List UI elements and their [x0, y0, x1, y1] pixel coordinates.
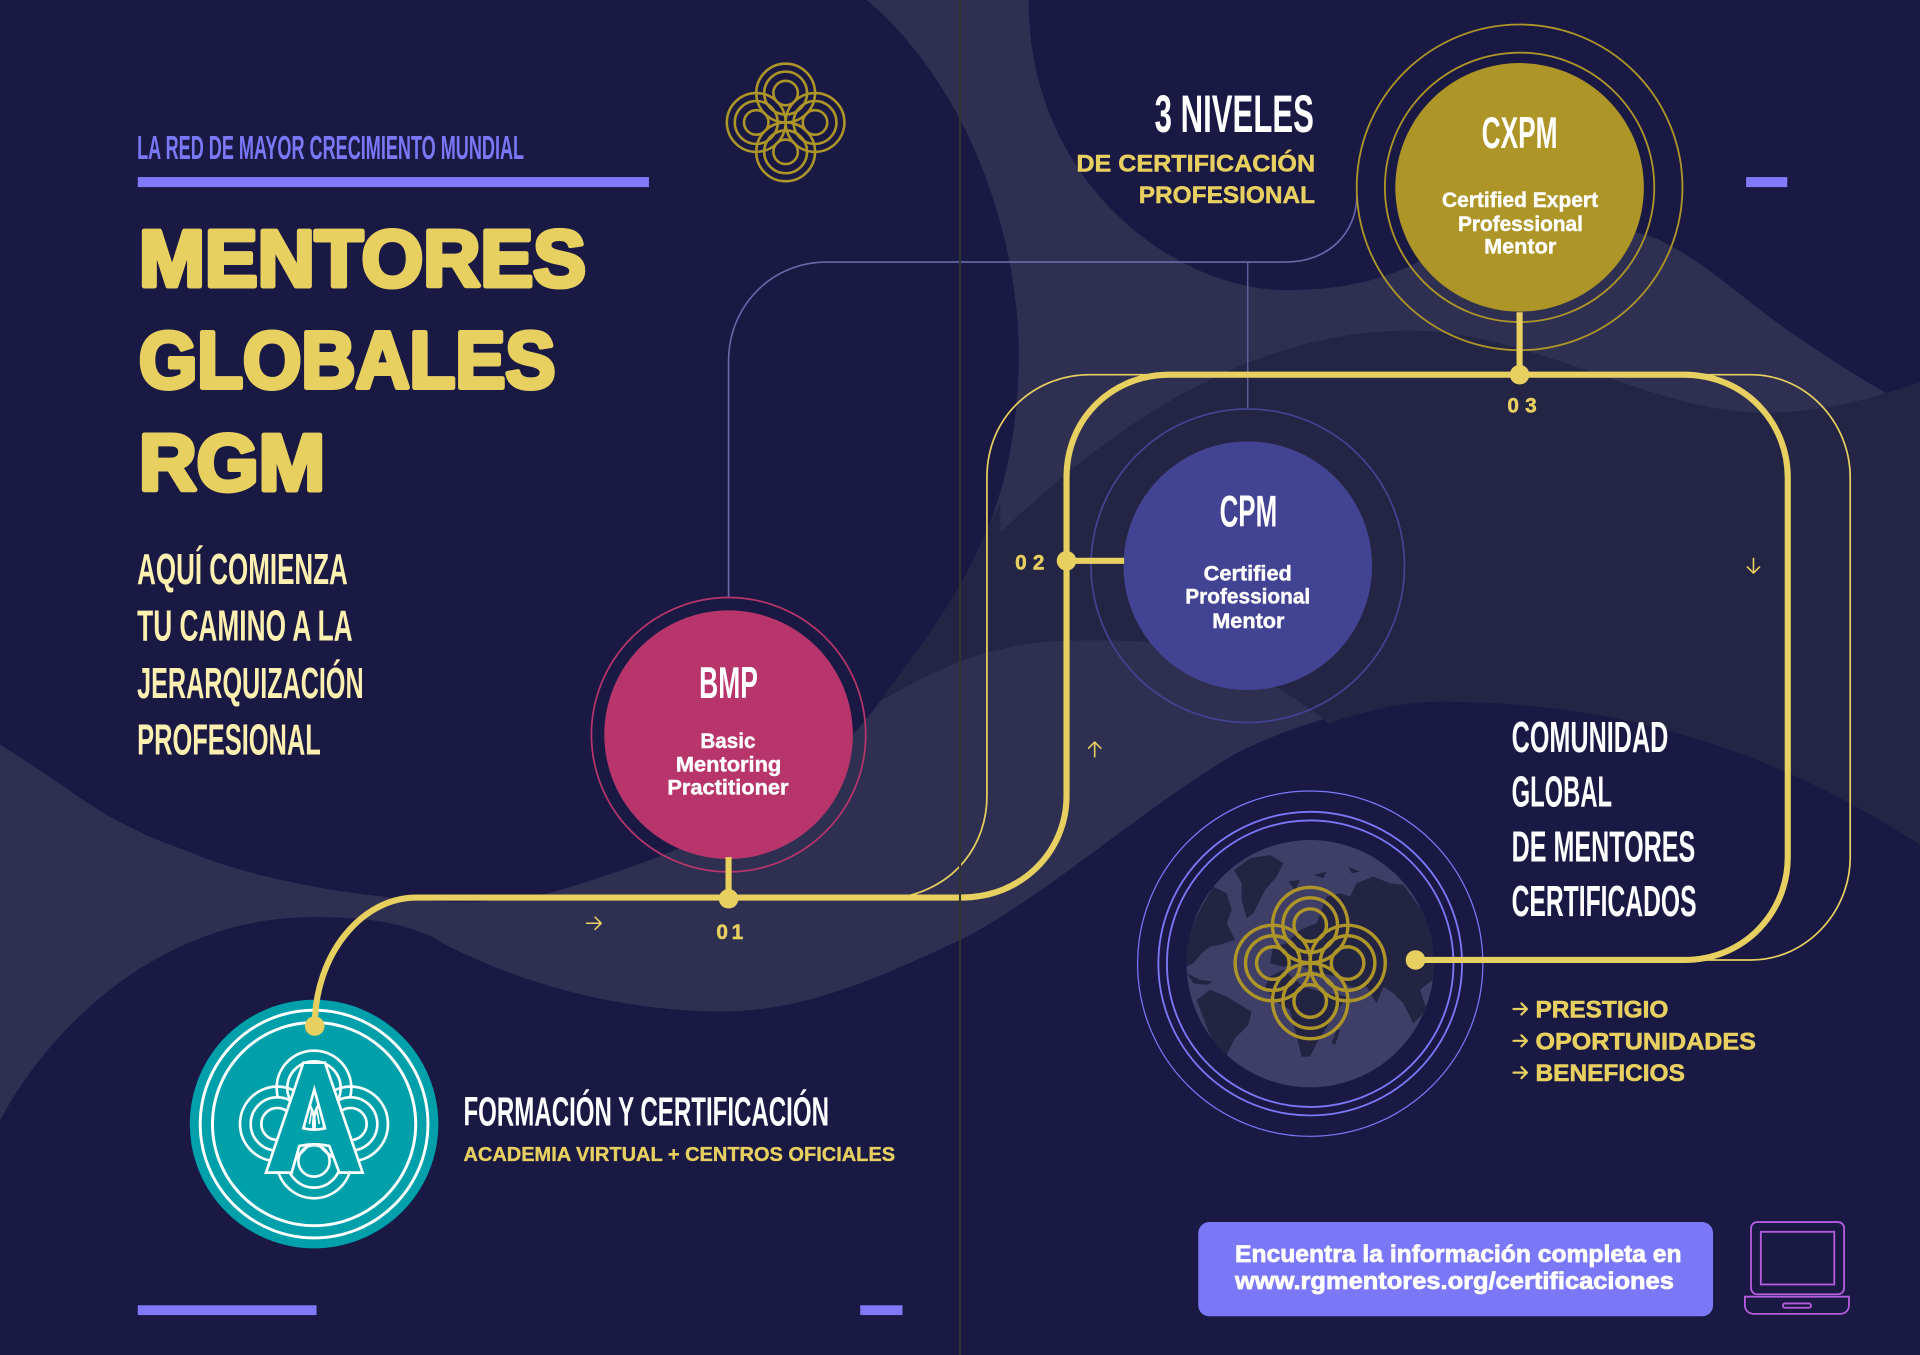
training text: [463, 1088, 895, 1166]
BMP name: Basic: [700, 730, 756, 753]
community heading: DE MENTORES: [1512, 823, 1695, 871]
CPM name: Certified: [1204, 562, 1292, 585]
subtitle: AQUÍ COMIENZA: [137, 544, 348, 594]
direction arrow up: [1089, 742, 1101, 757]
kicker: LA RED DE MAYOR CRECIMIENTO MUNDIAL: [137, 130, 524, 167]
community heading: CERTIFICADOS: [1512, 878, 1697, 926]
step number 01: 01: [716, 921, 743, 944]
benefits list: BENEFICIOS: [1536, 1060, 1685, 1087]
CXPM name: [1442, 189, 1598, 258]
academy badge: [190, 1000, 438, 1248]
CXPM code: CXPM: [1482, 109, 1558, 158]
title: MENTORES: [139, 214, 586, 303]
kicker bar: [138, 177, 649, 187]
heading: 3 niveles: DE CERTIFICACIÓN: [1076, 149, 1315, 177]
call to action: www.rgmentores.org/certificaciones: [1234, 1268, 1674, 1295]
CPM code: CPM: [1220, 488, 1277, 537]
globe with rings and logo: [1138, 791, 1483, 1136]
stems and nodes: [305, 312, 1529, 1036]
heading: 3 niveles: PROFESIONAL: [1139, 182, 1315, 209]
subtitle: PROFESIONAL: [137, 716, 321, 764]
accent bar bottom center: [860, 1305, 902, 1315]
CXPM name: Professional: [1458, 213, 1583, 236]
step number 03: 03: [1507, 395, 1537, 418]
accent bar bottom left: [138, 1305, 317, 1315]
title: RGM: [139, 418, 325, 507]
CPM name: [1185, 562, 1310, 633]
connector: thin yellow route: [900, 375, 1850, 960]
community heading: [1512, 714, 1697, 926]
logo: gold quatrefoil: [727, 64, 844, 181]
BMP name: Mentoring: [676, 753, 781, 776]
call to action: Encuentra la información completa en: [1235, 1241, 1682, 1268]
subtitle: TU CAMINO A LA: [137, 602, 353, 650]
call to action: [1198, 1222, 1713, 1316]
subtitle: JERARQUIZACIÓN: [137, 658, 364, 708]
heading: 3 niveles: 3 NIVELES: [1155, 85, 1314, 144]
direction arrow down: [1747, 558, 1760, 573]
community heading: GLOBAL: [1512, 768, 1612, 816]
direction arrow right: [587, 917, 601, 929]
title: GLOBALES: [139, 316, 555, 405]
benefits list: PRESTIGIO: [1536, 997, 1668, 1024]
training text: FORMACIÓN Y CERTIFICACIÓN: [463, 1088, 829, 1134]
accent bar top right: [1746, 177, 1787, 187]
CPM name: Mentor: [1212, 610, 1284, 633]
level circle: CXPM: [1357, 24, 1682, 350]
benefits list: OPORTUNIDADES: [1536, 1028, 1756, 1055]
training text: ACADEMIA VIRTUAL + CENTROS OFICIALES: [463, 1144, 895, 1166]
connector: thin purple path: [729, 196, 1357, 598]
level circle: BMP: [591, 598, 866, 872]
benefits list: [1513, 997, 1756, 1087]
CXPM name: Certified Expert: [1442, 189, 1598, 212]
CXPM name: Mentor: [1484, 235, 1556, 258]
BMP code: BMP: [699, 659, 758, 708]
title: [139, 214, 586, 507]
world continents: [1183, 855, 1437, 1057]
level circle: CPM: [1091, 409, 1404, 722]
community heading: COMUNIDAD: [1512, 714, 1668, 762]
step number 02: 02: [1015, 551, 1044, 574]
gold logo on globe: [1235, 887, 1385, 1039]
main yellow route: [315, 375, 1788, 1026]
BMP name: [667, 730, 789, 800]
CPM name: Professional: [1185, 586, 1310, 609]
heading: 3 niveles: [1076, 85, 1315, 209]
subtitle: [137, 544, 364, 764]
letter A: [266, 1063, 363, 1173]
BMP name: Practitioner: [667, 777, 789, 800]
icon: laptop: [1745, 1222, 1849, 1314]
